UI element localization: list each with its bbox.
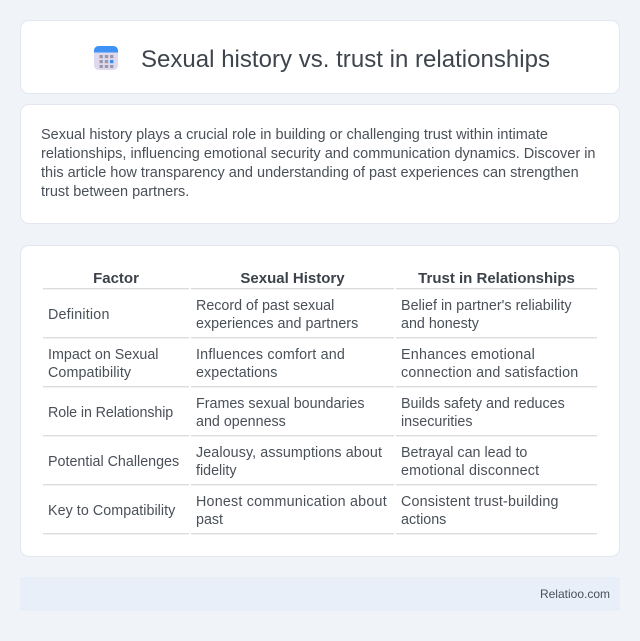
row: key to compatibility [48, 494, 559, 528]
row: impact: Enhances emotional [401, 347, 535, 363]
row: definition: Definition [48, 307, 110, 323]
footer brand: Relatioo.com [540, 587, 610, 601]
intro paragraph: this article how transparency and understanding of past experiences can strengthen [41, 165, 579, 181]
row: challenges: fidelity [196, 463, 237, 479]
row: challenges: Jealousy, assumptions about [196, 445, 382, 461]
intro paragraph: trust between partners. [41, 184, 189, 200]
row: definition: and honesty [401, 316, 479, 332]
intro paragraph: relationships, influencing emotional security and communication dynamics. Discover in [41, 146, 595, 162]
row: key to compatibility: Consistent trust-building [401, 494, 559, 510]
row: definition: Belief in partner's reliability [401, 298, 572, 314]
intro text panel [20, 104, 620, 224]
row: role: insecurities [401, 414, 473, 430]
row: definition: Record of past sexual [196, 298, 334, 314]
row: impact: connection and satisfaction [401, 365, 578, 381]
row: role: Builds safety and reduces [401, 396, 565, 412]
footer bar [20, 577, 620, 611]
row: role [48, 396, 565, 430]
row: challenges [48, 445, 539, 479]
row: definition: experiences and partners [196, 316, 358, 332]
row: role: Role in Relationship [48, 405, 173, 421]
row: impact: Compatibility [48, 365, 131, 381]
row: challenges: emotional disconnect [401, 463, 539, 479]
comparison table panel [20, 245, 620, 557]
header row: Factor [93, 270, 139, 287]
row: impact: Influences comfort and [196, 347, 345, 363]
row: impact [48, 347, 578, 381]
title: Sexual history vs. trust in relationships [141, 46, 550, 73]
row: key to compatibility: past [196, 512, 223, 528]
row: key to compatibility: actions [401, 512, 446, 528]
intro paragraph [41, 127, 595, 200]
row: key to compatibility: Honest communication about [196, 494, 387, 510]
row: impact: Impact on Sexual [48, 347, 158, 363]
header row: Trust in Relationships [418, 270, 575, 287]
icon: calendar [94, 46, 118, 70]
row: key to compatibility: Key to Compatibility [48, 503, 175, 519]
header row: Sexual History [240, 270, 345, 287]
row: challenges: Potential Challenges [48, 454, 179, 470]
row: definition [48, 298, 572, 332]
row: challenges: Betrayal can lead to [401, 445, 527, 461]
row: role: Frames sexual boundaries [196, 396, 364, 412]
header row [93, 270, 575, 287]
row: role: and openness [196, 414, 286, 430]
intro paragraph: Sexual history plays a crucial role in building or challenging trust within intimate [41, 127, 548, 143]
title card [20, 20, 620, 94]
row: impact: expectations [196, 365, 277, 381]
